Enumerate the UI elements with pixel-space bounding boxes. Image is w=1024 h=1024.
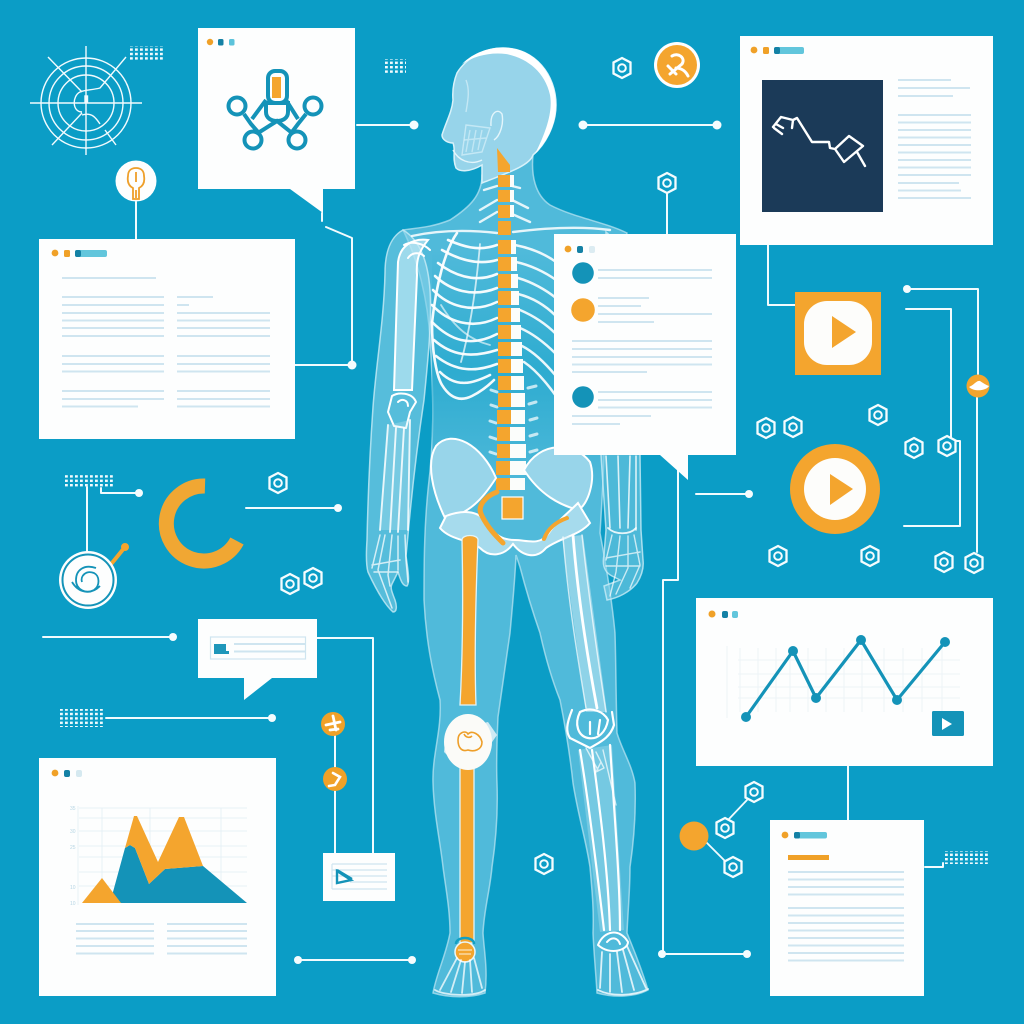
human skeleton figure bbox=[366, 48, 648, 997]
icon: mini tag bbox=[214, 644, 229, 654]
white right half of vertebrae bbox=[510, 175, 526, 490]
forearm bbox=[380, 420, 410, 530]
panel: small speech bubble bbox=[198, 619, 317, 700]
axis labels: 10 bbox=[70, 885, 76, 891]
spine bbox=[490, 148, 537, 490]
area: teal series bbox=[110, 845, 247, 903]
left arm bones bbox=[372, 240, 430, 608]
rib cage: left ribs bbox=[432, 233, 497, 399]
icon: molecule network bbox=[228, 71, 322, 148]
body silhouette: torso and legs bbox=[403, 155, 648, 997]
window dots bbox=[565, 246, 595, 253]
ear and jaw detail bbox=[453, 80, 503, 162]
vertebrae side processes bbox=[490, 386, 537, 468]
orange vertebral column bbox=[496, 148, 511, 490]
icon: orange ring gauge bbox=[166, 486, 237, 561]
right arm silhouette bbox=[601, 232, 643, 600]
dot matrix: lower right bbox=[943, 851, 988, 864]
panel: line chart bbox=[696, 598, 993, 766]
icon: small orange badge lower bbox=[323, 767, 347, 791]
panel: two-column text bbox=[39, 239, 295, 439]
window dots bbox=[52, 770, 82, 777]
data points bbox=[741, 635, 950, 722]
collar bones bbox=[412, 186, 610, 236]
left foot bones bbox=[435, 958, 485, 995]
bullet: teal bbox=[572, 262, 594, 284]
icon: mini play bbox=[337, 870, 352, 883]
torso darker core bbox=[432, 250, 604, 490]
icon: tool arm bbox=[773, 117, 865, 166]
icon: magnifier circle bbox=[59, 543, 129, 609]
hexagon badge: above list panel bbox=[658, 173, 676, 193]
text lines bbox=[898, 80, 971, 198]
right shin bbox=[578, 745, 624, 932]
bullet: orange bbox=[571, 298, 595, 322]
right arm bones bbox=[606, 456, 640, 596]
window dots bbox=[207, 39, 234, 46]
icon: play in orange circle bbox=[790, 444, 880, 534]
axis labels: 30 bbox=[70, 829, 76, 835]
panel: network callout bbox=[198, 28, 355, 213]
axis labels bbox=[70, 806, 76, 907]
hexagon badge: between legs bbox=[536, 854, 552, 874]
heading bar bbox=[788, 855, 829, 860]
dot matrix: lower left bbox=[59, 709, 103, 727]
icon: video bbox=[932, 711, 964, 736]
icon: radar target bbox=[30, 46, 142, 155]
bullet: teal lower bbox=[572, 386, 594, 408]
left arm silhouette bbox=[366, 230, 431, 612]
pelvis bbox=[431, 439, 592, 555]
panel: text document bbox=[770, 820, 924, 996]
panel: dark image with text bbox=[740, 36, 993, 245]
axis labels: 10 bbox=[70, 901, 76, 907]
connector end dots bbox=[135, 120, 911, 964]
icon: small orange badge upper bbox=[321, 712, 345, 736]
panel: small play card bbox=[323, 853, 395, 901]
window dots bbox=[708, 610, 738, 618]
icon: key badge bbox=[116, 160, 156, 202]
left hand bbox=[372, 535, 408, 608]
hexagon badge: top centre bbox=[614, 58, 630, 78]
axis labels: 35 bbox=[70, 806, 76, 812]
axis labels: 25 bbox=[70, 845, 76, 851]
hexagon badges: right cluster bbox=[758, 405, 982, 573]
area: orange peaks bbox=[125, 816, 203, 884]
right leg bones bbox=[562, 535, 648, 995]
icon: orange badge bbox=[654, 42, 700, 88]
dot matrix: above shoulder bbox=[383, 59, 406, 73]
left leg orange bones bbox=[435, 536, 497, 995]
dot matrix: mid left bbox=[63, 475, 114, 488]
elbow bbox=[388, 394, 416, 428]
line series bbox=[746, 640, 945, 717]
right knee bbox=[567, 710, 614, 748]
right ankle and foot bbox=[598, 933, 628, 951]
head bbox=[442, 48, 556, 183]
hexagon badges: node tree bbox=[716, 782, 762, 877]
icon: play in orange square bbox=[795, 292, 881, 375]
text lines bbox=[788, 872, 904, 960]
dark image tile bbox=[762, 80, 883, 212]
chart grid bbox=[78, 806, 247, 905]
knee joint bbox=[444, 722, 497, 760]
text lines bbox=[572, 270, 712, 424]
text lines bbox=[234, 644, 305, 652]
skull rim highlight bbox=[462, 48, 556, 154]
text lines bbox=[76, 924, 247, 954]
panel: area chart bbox=[39, 758, 276, 996]
hexagon badges: left cluster bbox=[270, 473, 322, 594]
panel: list with bullets bbox=[554, 234, 736, 480]
dot matrix: top left bbox=[130, 46, 164, 60]
rib cage: right ribs bbox=[515, 245, 556, 396]
text lines bbox=[62, 278, 270, 406]
ankle joint bbox=[456, 938, 474, 944]
chart grid bbox=[727, 646, 960, 718]
area: orange small triangle bbox=[82, 878, 121, 903]
icon: small orange node on right rail bbox=[966, 374, 990, 398]
icon: orange node bbox=[680, 822, 708, 850]
window dots bbox=[52, 250, 107, 257]
window dots bbox=[782, 832, 827, 838]
window dots bbox=[751, 47, 804, 54]
connector lines bbox=[43, 125, 978, 960]
